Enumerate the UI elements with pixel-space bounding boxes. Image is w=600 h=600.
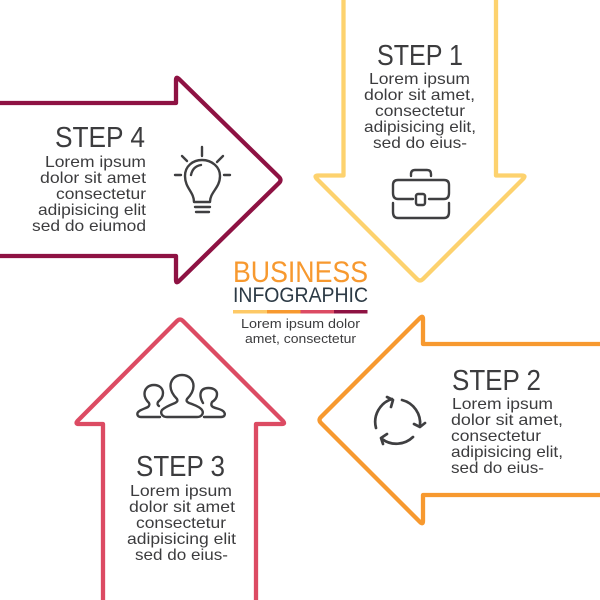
text block: step 2: adipisicing elit, xyxy=(451,444,563,461)
text block: step 3: consectetur xyxy=(136,515,227,532)
title block xyxy=(233,256,368,346)
text block: step 3: Lorem ipsum xyxy=(130,483,232,500)
text block: step 1: dolor sit amet, xyxy=(364,87,475,104)
text block: step 1: consectetur xyxy=(375,103,466,120)
arrow: step 3 red xyxy=(77,320,284,600)
arrow: step 2 orange xyxy=(320,317,600,523)
text block: step 3 xyxy=(127,483,237,564)
text block: step 1 xyxy=(364,71,476,152)
text block: step 4: consectetur xyxy=(56,186,147,203)
icon: briefcase xyxy=(393,170,449,218)
heading: step 1: STEP 1 xyxy=(377,40,463,72)
text block: step 1: adipisicing elit, xyxy=(364,119,476,136)
subtitle: Lorem ipsum dolor xyxy=(241,316,361,331)
text block: step 4: sed do eiumod xyxy=(32,218,146,235)
text block: step 2: consectetur xyxy=(451,428,542,445)
text block: step 1: Lorem ipsum xyxy=(369,71,470,88)
heading: step 3: STEP 3 xyxy=(136,451,225,483)
title: infographic: INFOGRAPHIC xyxy=(233,284,368,307)
arrow: step 4 maroon xyxy=(0,78,280,282)
heading: step 2: STEP 2 xyxy=(452,365,541,397)
heading: step 4: STEP 4 xyxy=(55,122,145,154)
text block: step 3: dolor sit amet xyxy=(129,499,236,516)
colour bar xyxy=(233,310,368,314)
icon: cycle arrows xyxy=(375,397,425,444)
panel: step 4 text xyxy=(32,122,147,235)
text block: step 3: adipisicing elit xyxy=(127,531,237,548)
text block: step 2: sed do eius- xyxy=(451,460,544,477)
text block: step 2: dolor sit amet, xyxy=(451,412,563,429)
text block: step 2 xyxy=(451,396,563,477)
icon: people xyxy=(137,375,225,417)
text block: step 4: Lorem ipsum xyxy=(45,154,146,171)
text block: step 4: adipisicing elit xyxy=(38,202,147,219)
text block: step 4 xyxy=(32,154,147,235)
title: business: BUSINESS xyxy=(233,256,368,289)
panel: step 2 text xyxy=(451,365,563,477)
text block: step 3: sed do eius- xyxy=(135,547,228,564)
subtitle xyxy=(241,316,361,346)
text block: step 1: sed do eius- xyxy=(373,135,467,152)
icon: light bulb xyxy=(175,147,230,212)
panel: step 1 text xyxy=(364,40,476,152)
text block: step 4: dolor sit amet xyxy=(40,170,147,187)
arrow: step 1 yellow xyxy=(316,0,524,280)
panel: step 3 text xyxy=(127,451,237,564)
subtitle: amet, consectetur xyxy=(245,331,357,346)
text block: step 2: Lorem ipsum xyxy=(452,396,553,413)
